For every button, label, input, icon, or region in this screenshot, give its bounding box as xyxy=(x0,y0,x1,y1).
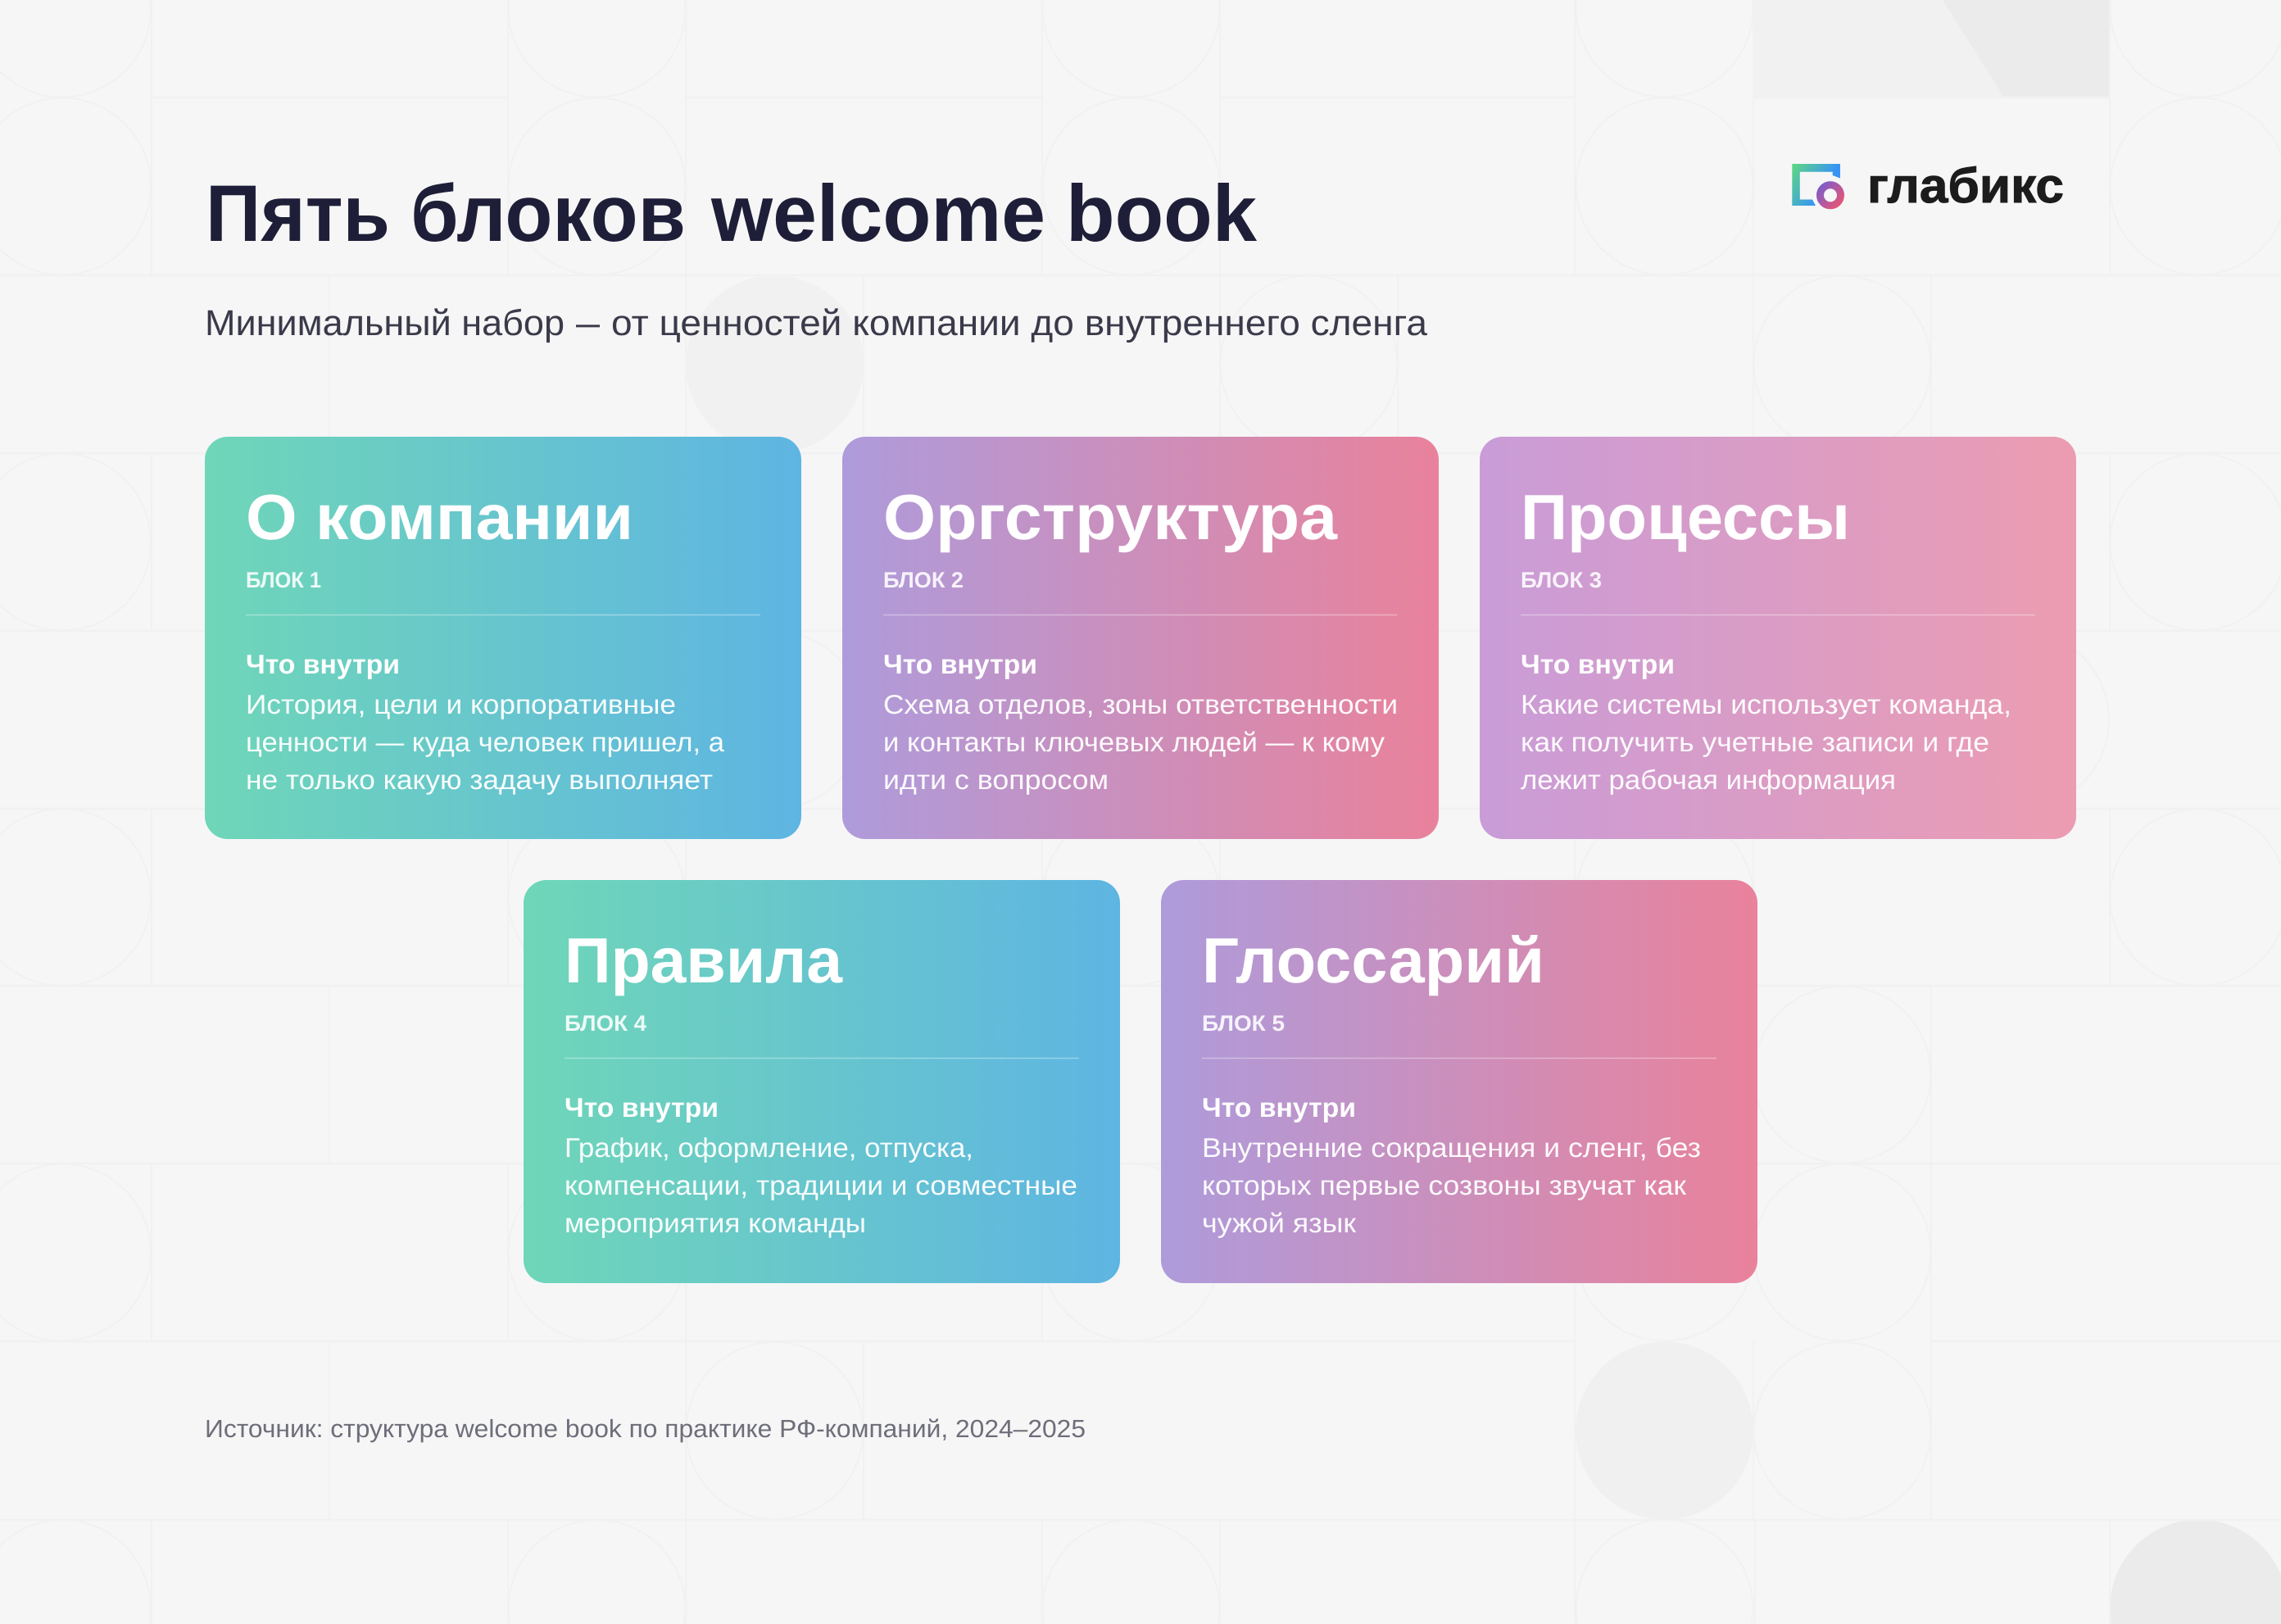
subtitle: Минимальный набор xyxy=(205,303,565,343)
body text: ценности — куда человек пришел, а xyxy=(246,727,725,757)
heading: Правила xyxy=(565,924,843,996)
label: БЛОК 3 xyxy=(1521,568,1602,592)
subheading: Что внутри xyxy=(883,649,1037,679)
label: БЛОК 5 xyxy=(1202,1011,1285,1036)
body text xyxy=(1202,1132,1701,1238)
body text: Схема отделов, зоны ответственности xyxy=(883,689,1398,719)
body text xyxy=(1521,689,2011,795)
body text xyxy=(883,689,1398,795)
heading: Оргструктура xyxy=(883,481,1338,553)
body text xyxy=(246,689,725,795)
body text: чужой язык xyxy=(1202,1208,1357,1238)
panel: О компании xyxy=(205,437,801,839)
subheading: Что внутри xyxy=(1521,649,1675,679)
label: БЛОК 1 xyxy=(246,568,321,592)
body text: которых первые созвоны звучат как xyxy=(1202,1170,1687,1200)
panel: Оргструктура xyxy=(842,437,1439,839)
subheading: Что внутри xyxy=(246,649,400,679)
body text: компенсации, традиции и совместные xyxy=(565,1170,1077,1200)
heading: О компании xyxy=(246,481,633,553)
heading: Процессы xyxy=(1521,481,1850,553)
title: Пять xyxy=(206,168,390,258)
subtitle xyxy=(205,303,1428,343)
body text: Какие системы использует команда, xyxy=(1521,689,2011,719)
title xyxy=(206,168,1257,258)
title: блоков xyxy=(410,168,686,258)
body text: идти с вопросом xyxy=(883,764,1109,795)
body text: График, оформление, отпуска, xyxy=(565,1132,973,1163)
subtitle: от ценностей компании до внутреннего сленга xyxy=(611,303,1428,343)
logo wordmark: глабикс xyxy=(1867,158,2064,213)
panel: Глоссарий xyxy=(1161,880,1757,1283)
panel: Правила xyxy=(524,880,1120,1283)
source note: Источник: структура welcome book по практике РФ-компаний, 2024–2025 xyxy=(205,1415,1086,1443)
body text: лежит рабочая информация xyxy=(1521,764,1896,795)
body text: и контакты ключевых людей — к кому xyxy=(883,727,1385,757)
label: БЛОК 4 xyxy=(565,1011,646,1036)
body text: не только какую задачу выполняет xyxy=(246,764,713,795)
subtitle: — xyxy=(576,303,600,343)
label: БЛОК 2 xyxy=(883,568,964,592)
subheading: Что внутри xyxy=(1202,1092,1356,1123)
body text: Внутренние сокращения и сленг, без xyxy=(1202,1132,1701,1163)
panel: Процессы xyxy=(1480,437,2076,839)
body text: мероприятия команды xyxy=(565,1208,866,1238)
subheading: Что внутри xyxy=(565,1092,719,1123)
title: book xyxy=(1066,168,1257,258)
body text xyxy=(565,1132,1077,1238)
heading: Глоссарий xyxy=(1202,924,1544,996)
icon: logo mark xyxy=(1792,164,1840,206)
logo: глабикс xyxy=(1792,158,2064,213)
title: welcome xyxy=(710,168,1045,258)
body text: История, цели и корпоративные xyxy=(246,689,676,719)
body text: как получить учетные записи и где xyxy=(1521,727,1989,757)
